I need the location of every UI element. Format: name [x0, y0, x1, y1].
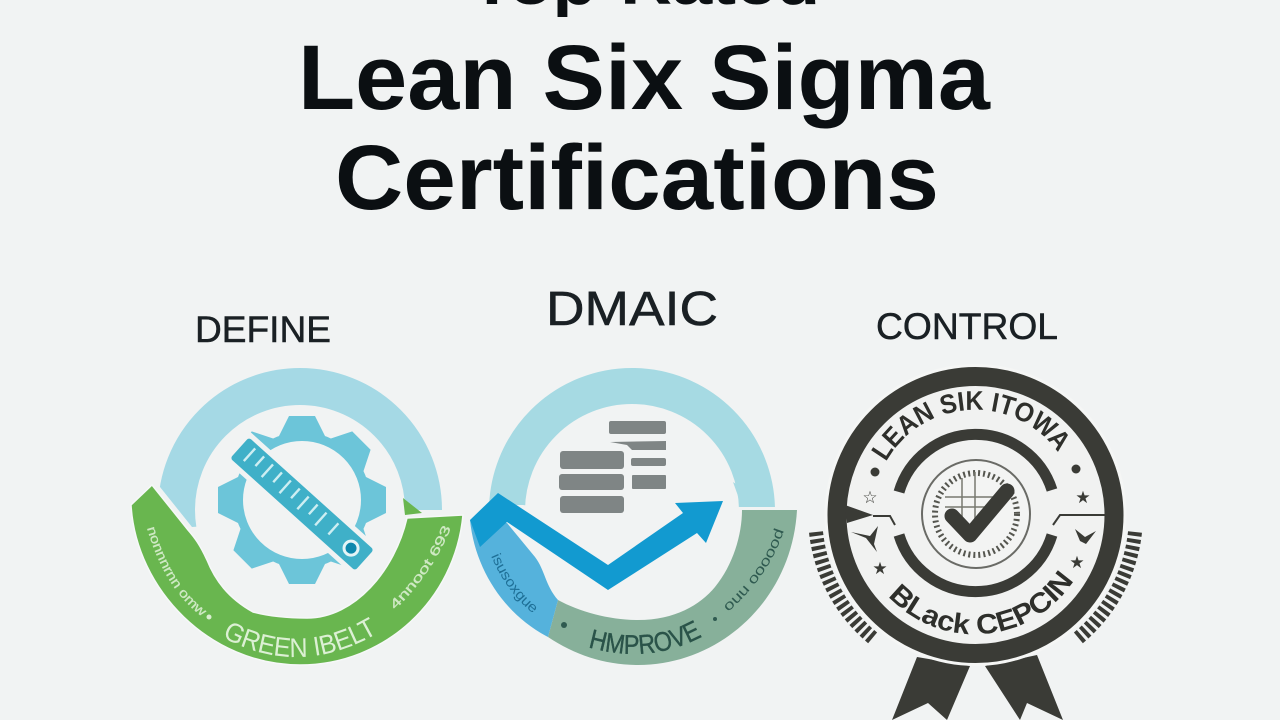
ribbon tails: [892, 655, 1063, 720]
band text: left: isusoxgue: [492, 553, 536, 612]
stars: ☆: [862, 488, 878, 508]
title line: Certifications: Certifications: [335, 127, 939, 229]
heading: DEFINE: DEFINE: [195, 309, 331, 350]
seal outer ring: [824, 364, 1126, 666]
green corner: [403, 498, 422, 515]
light blue ring: [160, 368, 442, 527]
band dot: [206, 614, 212, 620]
icon: zigzag arrow: [470, 493, 723, 590]
inner arcs: [899, 434, 1052, 592]
seal text: top: LEAN SIK ITOWA: [871, 391, 1068, 460]
band text: left: nonnnrnn omw: [147, 526, 206, 616]
band text: IMPROVE: HMPROVE: [590, 620, 702, 654]
seal text: bottom: BLack CEPCIN: [889, 570, 1073, 634]
stars: [862, 488, 1091, 579]
light blue ring: [489, 368, 775, 507]
icon: gear: [218, 416, 386, 584]
icon: check mark: [952, 491, 1007, 535]
badge: green belt: [132, 368, 462, 664]
icon: ruler: [215, 423, 386, 582]
separators: [845, 505, 1107, 525]
stars: ★: [872, 559, 888, 579]
blue band: [470, 520, 558, 637]
band text: right: 4nnoot 693: [393, 526, 450, 608]
dots: [870, 464, 1080, 476]
band text: right: ouu oooood: [725, 528, 784, 610]
green band: [131, 485, 463, 665]
green band: [548, 510, 797, 665]
title line: Lean Six Sigma: Lean Six Sigma: [298, 27, 991, 129]
center emblem: [922, 460, 1030, 568]
title: [298, 0, 991, 229]
stars: ★: [1075, 488, 1091, 508]
stars: ★: [1069, 553, 1085, 573]
laurel right: [1077, 532, 1135, 639]
heading: DMAIC: DMAIC: [546, 283, 718, 336]
heading: CONTROL: CONTROL: [876, 306, 1058, 347]
badge: DMAIC improve: [470, 368, 797, 665]
band dots: [561, 617, 717, 628]
small birds: [851, 526, 1096, 552]
seal dark ring: [837, 376, 1114, 654]
badge: black belt seal: [809, 367, 1142, 720]
ring end flare: [733, 482, 752, 507]
laurel left: [816, 532, 874, 639]
icon: grey data bars: [559, 421, 666, 513]
band text: GREEN IBELT: GREEN IBELT: [226, 617, 372, 658]
